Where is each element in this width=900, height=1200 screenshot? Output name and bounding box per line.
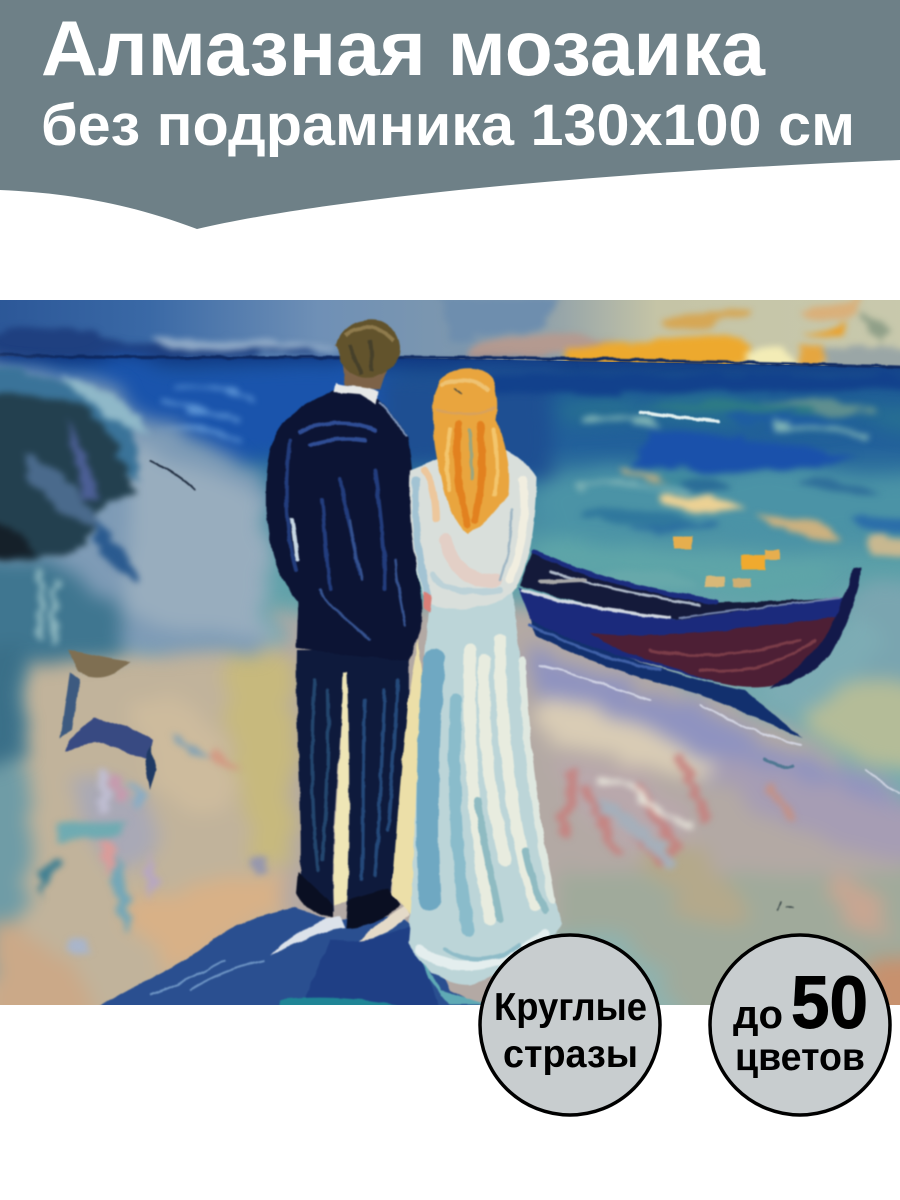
man: collar — [334, 383, 378, 404]
man: jacket — [266, 388, 422, 662]
woman: bodice and sleeves — [410, 450, 537, 609]
man: hair — [336, 320, 400, 378]
pale sandy slope and dark cliff — [0, 360, 268, 770]
badge: up to 50 colours: 50 — [791, 961, 868, 1044]
title: Алмазная мозаика — [41, 4, 766, 92]
horizon line and whitecap — [0, 355, 900, 421]
man in dark suit — [266, 320, 422, 928]
man: cream gap between the legs — [334, 666, 352, 905]
boat shadow — [530, 612, 802, 738]
painting: couple on the beach — [0, 290, 900, 1060]
boat hull — [518, 587, 845, 687]
badge: up to 50 colours: до — [733, 993, 783, 1037]
driftwood strokes on the left of the beach — [60, 650, 156, 790]
badge: round rhinestones: стразы — [503, 1033, 638, 1076]
man: legs — [297, 650, 408, 912]
pale highlights on the sand — [540, 665, 900, 910]
sun reflection dabs — [674, 536, 779, 587]
woman: skirt — [408, 590, 562, 985]
header banner — [0, 0, 900, 229]
boat maroon planks — [590, 617, 836, 687]
sky — [0, 300, 900, 367]
badge: up to 50 colours — [710, 935, 890, 1115]
boat stem — [770, 567, 861, 688]
sea — [0, 355, 900, 840]
badge: up to 50 colours: цветов — [735, 1036, 865, 1079]
subtitle: без подрамника 130х100 см — [41, 93, 855, 158]
badge: round rhinestones: Круглые — [494, 986, 647, 1029]
pink brushwork on the sand — [562, 760, 790, 860]
blue shadow at the couple's feet — [95, 905, 490, 1010]
beach — [0, 590, 900, 1060]
boat interior — [520, 550, 845, 620]
soft colour patches on the left of the beach — [40, 735, 266, 958]
badge: round rhinestones — [480, 935, 660, 1115]
woman: hand — [424, 592, 432, 612]
boat — [518, 550, 861, 738]
man: neck and ear — [334, 344, 388, 390]
man: shoes — [296, 872, 400, 928]
woman: hair — [433, 369, 509, 534]
woman: cream edge of the gown — [390, 640, 423, 914]
woman in white dress — [392, 369, 562, 985]
